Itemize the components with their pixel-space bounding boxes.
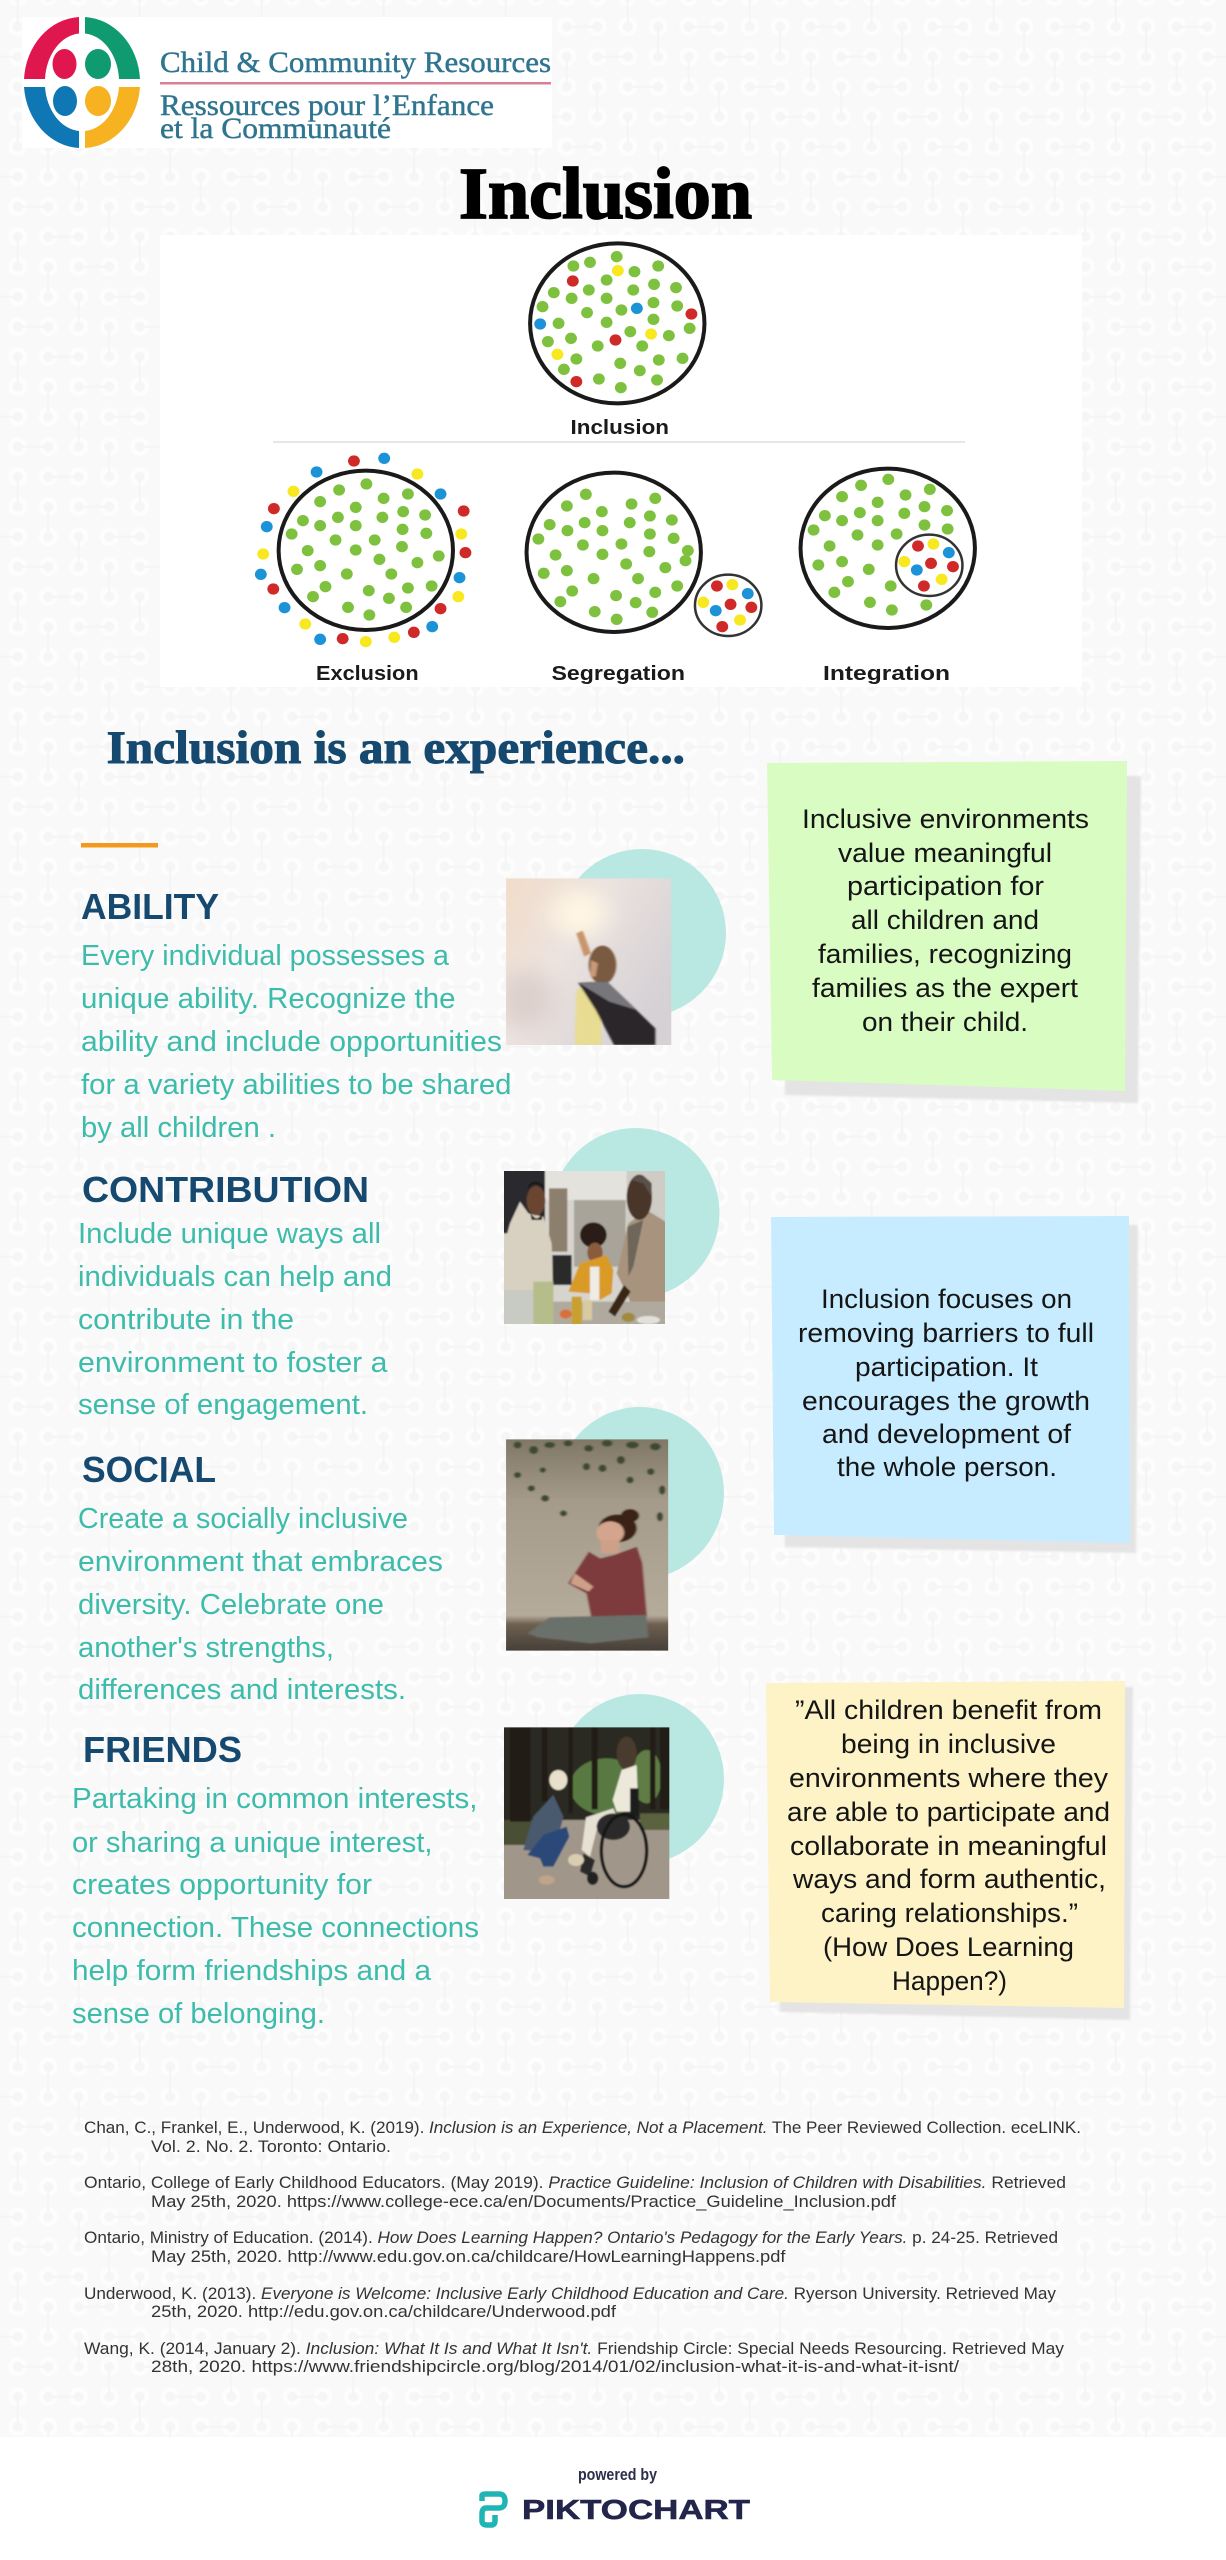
diagram label: Integration: Integration bbox=[823, 663, 950, 685]
text: contribution body: Include unique ways all bbox=[78, 1218, 381, 1250]
text: contribution body: contribute in the bbox=[78, 1304, 294, 1336]
text: friends body: sense of belonging. bbox=[72, 1998, 325, 2030]
accent bar bbox=[81, 843, 158, 848]
logo wordmark: Child & Community Resources bbox=[160, 46, 551, 79]
callout: yellow sticky note quote: Happen?) bbox=[892, 1966, 1007, 1996]
callout: blue sticky note bbox=[771, 1216, 1138, 1553]
logo wordmark: Ressources pour l’Enfance bbox=[160, 89, 494, 122]
text: friends body: connection. These connections bbox=[72, 1912, 479, 1944]
callout: yellow sticky note quote: collaborate in meaningful bbox=[790, 1831, 1107, 1861]
references: Vol. 2. No. 2. Toronto: Ontario. bbox=[151, 2137, 391, 2156]
callout: green sticky note: value meaningful bbox=[838, 838, 1052, 868]
logo wordmark bbox=[160, 46, 551, 145]
text: ability body: for a variety abilities to be shared bbox=[81, 1069, 512, 1101]
callout: yellow sticky note quote: are able to participate and bbox=[787, 1797, 1110, 1827]
references: Ontario, College of Early Childhood Educators. (May 2019). Practice Guideline: Inclusion of Children with Disabilities. Retrieved bbox=[84, 2173, 1066, 2192]
text: friends body: Partaking in common interests, bbox=[72, 1783, 477, 1815]
text: social body: diversity. Celebrate one bbox=[78, 1589, 384, 1621]
text: social body: differences and interests. bbox=[78, 1674, 406, 1706]
text: social body: Create a socially inclusive bbox=[78, 1503, 408, 1535]
heading: ability: ABILITY bbox=[81, 886, 219, 927]
text: contribution body: sense of engagement. bbox=[78, 1389, 368, 1421]
heading: social: SOCIAL bbox=[82, 1449, 216, 1490]
decorative teal circle: contribution bbox=[552, 1128, 720, 1298]
callout: yellow sticky note quote bbox=[766, 1681, 1133, 2020]
text: contribution body: environment to foster a bbox=[78, 1347, 388, 1379]
section: contribution bbox=[78, 1128, 720, 1421]
diagram label: Segregation: Segregation bbox=[552, 663, 685, 685]
references: May 25th, 2020. https://www.college-ece.ca/en/Documents/Practice_Guideline_Inclusion.pdf bbox=[151, 2192, 896, 2211]
references: Underwood, K. (2013). Everyone is Welcome: Inclusive Early Childhood Education and Care. Ryerson University. Retrieved May bbox=[84, 2284, 1056, 2303]
decorative teal circle: friends bbox=[556, 1694, 724, 1864]
callout: yellow sticky note quote: caring relationships.” bbox=[821, 1898, 1078, 1928]
section: social bbox=[78, 1407, 724, 1706]
footer: powered by Piktochart bbox=[482, 2465, 750, 2525]
callout: yellow sticky note quote: ways and form authentic, bbox=[792, 1864, 1106, 1894]
title: Inclusion bbox=[459, 153, 752, 234]
text: social body bbox=[78, 1503, 443, 1706]
callout: green sticky note: all children and bbox=[851, 905, 1039, 935]
decorative teal circle: social bbox=[556, 1407, 724, 1579]
diagram panel: inclusion, exclusion, segregation, integration bbox=[160, 235, 1082, 687]
references: Chan, C., Frankel, E., Underwood, K. (2019). Inclusion is an Experience, Not a Placement. The Peer Reviewed Collection. eceLINK. bbox=[84, 2118, 1081, 2137]
references: May 25th, 2020. http://www.edu.gov.on.ca/childcare/HowLearningHappens.pdf bbox=[151, 2247, 786, 2266]
references: 25th, 2020. http://edu.gov.on.ca/childcare/Underwood.pdf bbox=[151, 2302, 616, 2321]
text: social body: environment that embraces bbox=[78, 1546, 443, 1578]
callout: yellow sticky note quote: (How Does Learning bbox=[823, 1932, 1074, 1962]
text: ability body bbox=[81, 940, 512, 1144]
section: ability bbox=[81, 849, 726, 1144]
heading: contribution: CONTRIBUTION bbox=[82, 1169, 369, 1210]
text: contribution body: individuals can help and bbox=[78, 1261, 392, 1293]
text: contribution body bbox=[78, 1218, 392, 1421]
photo: friends and wheelchair in forest bbox=[500, 1723, 673, 1902]
callout: green sticky note: participation for bbox=[847, 871, 1044, 901]
footer: powered by Piktochart: PIKTOCHART bbox=[522, 2494, 750, 2525]
logo icon: four-colour ring bbox=[24, 17, 140, 148]
text: friends body: creates opportunity for bbox=[72, 1869, 372, 1901]
callout: green sticky note: on their child. bbox=[862, 1007, 1028, 1037]
footer band bbox=[0, 2437, 1226, 2560]
callout: blue sticky note: participation. It bbox=[855, 1352, 1039, 1382]
footer: powered by Piktochart: powered by bbox=[578, 2465, 657, 2484]
photo: family cooking in kitchen bbox=[500, 1167, 670, 1327]
text: ability body: by all children . bbox=[81, 1112, 276, 1144]
callout: blue sticky note: removing barriers to full bbox=[798, 1318, 1094, 1348]
callout: green sticky note: families as the expert bbox=[812, 973, 1079, 1003]
callout: yellow sticky note quote: environments where they bbox=[789, 1763, 1109, 1793]
diagram: segregation circles bbox=[527, 473, 761, 636]
diagram: exclusion circle bbox=[255, 453, 471, 647]
logo wordmark: et la Communauté bbox=[160, 112, 391, 145]
callout: green sticky note: Inclusive environments bbox=[802, 804, 1089, 834]
subtitle: Inclusion is an experience... bbox=[107, 722, 685, 774]
photo: child in superhero cape bbox=[499, 878, 671, 1045]
text: social body: another's strengths, bbox=[78, 1632, 334, 1664]
callout: blue sticky note: the whole person. bbox=[837, 1452, 1057, 1482]
decorative teal circle: ability bbox=[558, 849, 726, 1017]
references: Ontario, Ministry of Education. (2014). How Does Learning Happen? Ontario's Pedagogy for the Early Years. p. 24-25. Retrieved bbox=[84, 2228, 1058, 2247]
callout: yellow sticky note quote: ”All children benefit from bbox=[795, 1695, 1102, 1725]
icon: Piktochart mark bbox=[482, 2494, 505, 2525]
callout: blue sticky note: Inclusion focuses on bbox=[821, 1284, 1072, 1314]
references: Wang, K. (2014, January 2). Inclusion: What It Is and What It Isn't. Friendship Circle: Special Needs Resourcing. Retrieved May bbox=[84, 2339, 1065, 2358]
section: friends bbox=[72, 1694, 724, 2030]
text: ability body: unique ability. Recognize the bbox=[81, 983, 456, 1015]
text: friends body: help form friendships and a bbox=[72, 1955, 432, 1987]
callout: green sticky note: families, recognizing bbox=[818, 939, 1072, 969]
callout: blue sticky note: and development of bbox=[822, 1419, 1072, 1449]
callout: yellow sticky note quote: being in inclusive bbox=[841, 1729, 1056, 1759]
text: friends body: or sharing a unique interest, bbox=[72, 1827, 432, 1859]
references bbox=[84, 2118, 1081, 2376]
text: friends body bbox=[72, 1783, 479, 2030]
logo: Child & Community Resources bbox=[22, 17, 552, 148]
callout: blue sticky note: encourages the growth bbox=[802, 1386, 1090, 1416]
text: ability body: Every individual possesses a bbox=[81, 940, 450, 972]
diagram: inclusion circle bbox=[530, 243, 704, 403]
callout: green sticky note bbox=[767, 761, 1141, 1103]
heading: friends: FRIENDS bbox=[83, 1729, 242, 1770]
diagram label: Inclusion: Inclusion bbox=[570, 417, 669, 439]
text: ability body: ability and include opportunities bbox=[81, 1026, 502, 1058]
diagram: integration circles bbox=[801, 469, 975, 628]
diagram label: Exclusion: Exclusion bbox=[316, 663, 419, 685]
references: 28th, 2020. https://www.friendshipcircle.org/blog/2014/01/02/inclusion-what-it-is-and-what-it-isnt/ bbox=[151, 2357, 959, 2376]
photo: woman meditating bbox=[506, 1439, 668, 1651]
